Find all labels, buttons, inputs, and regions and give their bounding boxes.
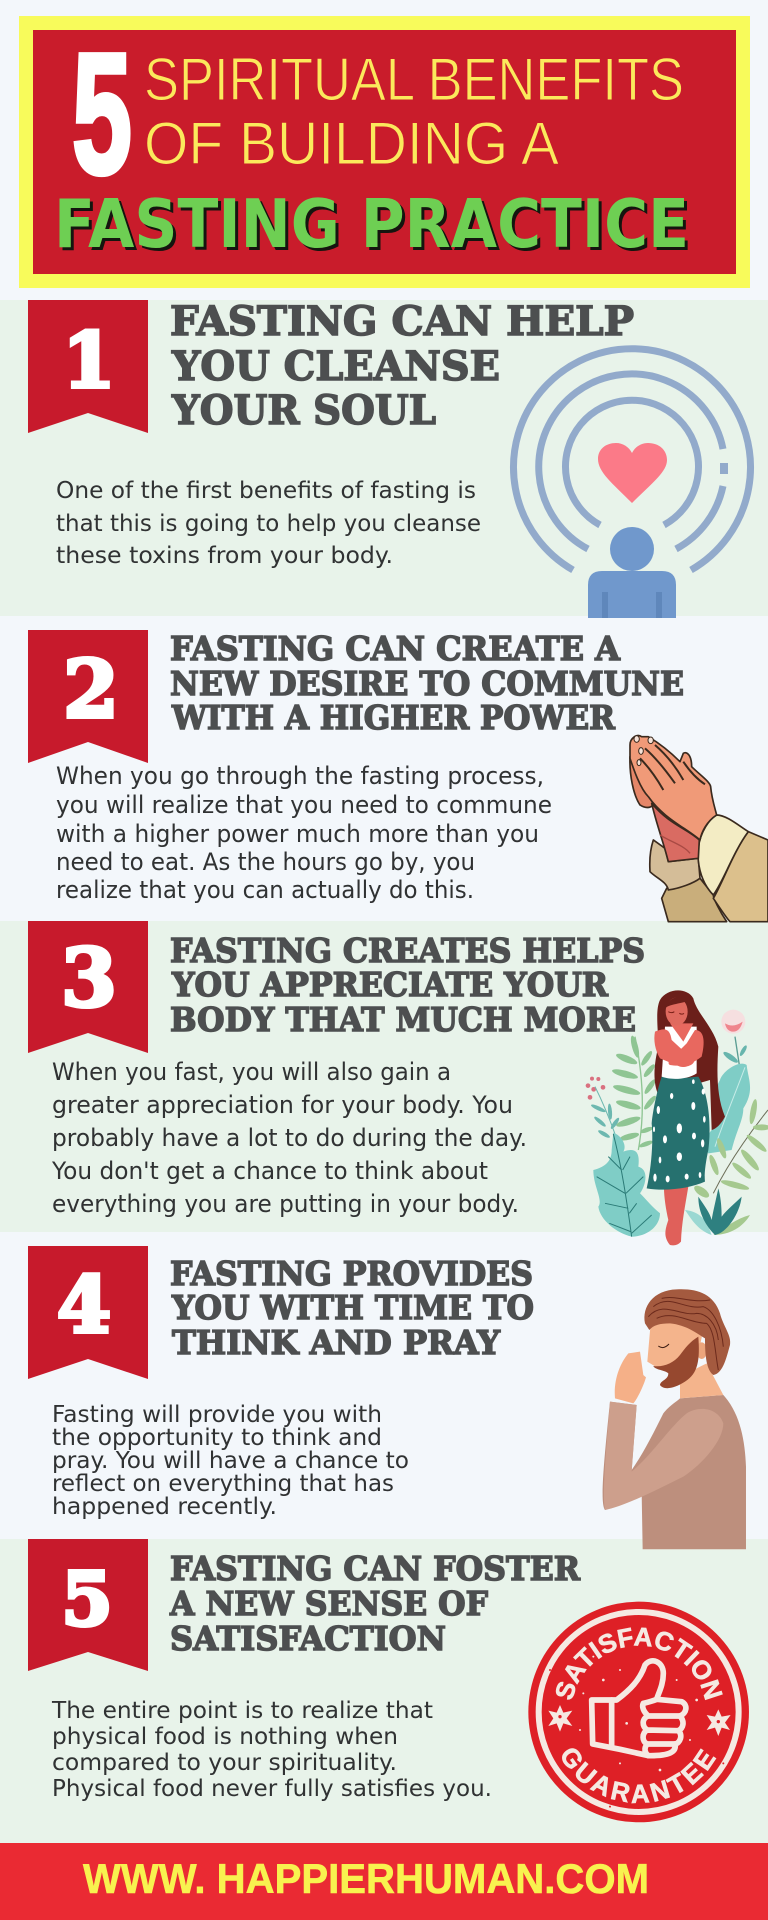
heading 1 bbox=[170, 298, 634, 434]
section 4: time to think and pray bbox=[28, 1246, 746, 1549]
heading 3: FASTING CREATES HELPS bbox=[170, 931, 645, 970]
icon: woman with plants bbox=[586, 990, 768, 1245]
title line 1: SPIRITUAL BENEFITS bbox=[144, 46, 684, 113]
body text 1: these toxins from your body. bbox=[56, 541, 393, 569]
footer bar with website: WWW. HAPPIERHUMAN.COM bbox=[83, 1855, 649, 1902]
number ribbon 4: 4 bbox=[57, 1260, 111, 1351]
heading 4: THINK AND PRAY bbox=[172, 1323, 500, 1362]
heading 1: YOU CLEANSE bbox=[171, 343, 500, 390]
right stem bbox=[713, 1110, 768, 1193]
body text 4: Fasting will provide you with bbox=[52, 1402, 382, 1428]
body text 5: Physical food never fully satisfies you. bbox=[52, 1774, 492, 1802]
heading 1: YOUR SOUL bbox=[171, 387, 436, 434]
body text 2: When you go through the fasting process, bbox=[56, 762, 544, 790]
body text 4: reflect on everything that has bbox=[52, 1471, 394, 1497]
body text 5 bbox=[51, 1696, 492, 1802]
number ribbon 1: 1 bbox=[63, 316, 115, 405]
woman arms bbox=[670, 1023, 693, 1042]
section 5: sense of satisfaction bbox=[28, 1539, 749, 1822]
number ribbon 5 bbox=[28, 1539, 148, 1671]
body text 5: physical food is nothing when bbox=[52, 1722, 398, 1750]
heading 3: BODY THAT MUCH MORE bbox=[170, 1000, 636, 1039]
heading 4: YOU WITH TIME TO bbox=[171, 1288, 534, 1327]
body text 5: The entire point is to realize that bbox=[51, 1696, 433, 1724]
number ribbon 3: 3 bbox=[61, 931, 117, 1025]
heading 5: A NEW SENSE OF bbox=[169, 1584, 488, 1623]
body text 3: everything you are putting in your body. bbox=[52, 1190, 519, 1218]
panel background: section 1 bbox=[0, 300, 768, 616]
icon: praying man bbox=[603, 1289, 746, 1549]
number ribbon 4 bbox=[28, 1246, 148, 1379]
woman legs bbox=[664, 1187, 688, 1245]
title line 2: OF BUILDING A bbox=[144, 110, 559, 177]
title banner bbox=[19, 16, 750, 288]
pink berries bbox=[586, 1077, 605, 1100]
heading 5 bbox=[169, 1549, 581, 1658]
body text 1: One of the first benefits of fasting is bbox=[56, 476, 476, 504]
stamp specks bbox=[579, 1639, 698, 1771]
panel background: section 5 bbox=[0, 1539, 768, 1843]
woman hair bbox=[654, 990, 725, 1130]
woman face bbox=[666, 998, 688, 1026]
icon: praying hands bbox=[630, 736, 768, 922]
body text 1: that this is going to help you cleanse bbox=[56, 509, 481, 537]
heading 1: FASTING CAN HELP bbox=[170, 298, 634, 345]
heading 3 bbox=[170, 931, 645, 1039]
thumbs up bbox=[592, 1661, 686, 1756]
body text 2: with a higher power much more than you bbox=[56, 820, 539, 848]
heading 5: FASTING CAN FOSTER bbox=[170, 1549, 581, 1588]
body text 3: greater appreciation for your body. You bbox=[52, 1091, 513, 1119]
body text 4: pray. You will have a chance to bbox=[52, 1448, 409, 1474]
body text 3: You don't get a chance to think about bbox=[51, 1157, 488, 1185]
big teal leaf bbox=[593, 1133, 660, 1237]
body text 1 bbox=[56, 476, 481, 569]
heading 3: YOU APPRECIATE YOUR bbox=[171, 965, 609, 1004]
section 3: appreciate your body bbox=[28, 921, 768, 1245]
body text 4: happened recently. bbox=[52, 1494, 277, 1520]
title line 3 with shadow: FASTING PRACTICE bbox=[54, 185, 689, 263]
body text 4: the opportunity to think and bbox=[52, 1425, 382, 1451]
number ribbon 1 bbox=[28, 300, 148, 433]
section 2: commune with a higher power bbox=[28, 629, 768, 922]
number ribbon 3 bbox=[28, 921, 148, 1053]
body text 3: probably have a lot to do during the day. bbox=[52, 1124, 527, 1152]
number ribbon 2: 2 bbox=[63, 642, 119, 736]
number ribbon 5: 5 bbox=[61, 1557, 113, 1643]
woman top bbox=[662, 1027, 697, 1079]
panel background: section 3 bbox=[0, 921, 768, 1232]
icon: satisfaction guarantee stamp: SATISFACTION bbox=[556, 1627, 723, 1700]
number ribbon 2 bbox=[28, 630, 148, 763]
heading 5: SATISFACTION bbox=[170, 1619, 446, 1658]
body text 2 bbox=[56, 762, 552, 904]
woman skirt bbox=[647, 1077, 710, 1190]
title line 3 with shadow: FASTING PRACTICE bbox=[57, 188, 692, 266]
heading 2: WITH A HIGHER POWER bbox=[171, 698, 616, 737]
body text 5: compared to your spirituality. bbox=[52, 1748, 397, 1776]
heading 2: NEW DESIRE TO COMMUNE bbox=[170, 664, 684, 703]
fern bbox=[611, 1035, 658, 1149]
icon: satisfaction guarantee stamp bbox=[528, 1602, 749, 1822]
icon: person with heart and signal rings bbox=[513, 349, 750, 618]
icon: satisfaction guarantee stamp: GUARANTEE bbox=[562, 1748, 716, 1804]
body text 2: need to eat. As the hours go by, you bbox=[56, 848, 475, 876]
heading 4: FASTING PROVIDES bbox=[170, 1254, 533, 1293]
body text 4 bbox=[52, 1402, 409, 1520]
heading 2 bbox=[170, 629, 684, 737]
body text 3: When you fast, you will also gain a bbox=[52, 1058, 451, 1086]
section 1: cleanse your soul bbox=[28, 298, 750, 618]
heading 4 bbox=[170, 1254, 534, 1362]
heading 2: FASTING CAN CREATE A bbox=[170, 629, 620, 668]
body text 2: realize that you can actually do this. bbox=[56, 876, 474, 904]
footer bar with website bbox=[0, 1843, 768, 1920]
body text 3 bbox=[51, 1058, 527, 1218]
body text 2: you will realize that you need to commune bbox=[56, 791, 552, 819]
big number 5: 5 bbox=[72, 18, 132, 210]
